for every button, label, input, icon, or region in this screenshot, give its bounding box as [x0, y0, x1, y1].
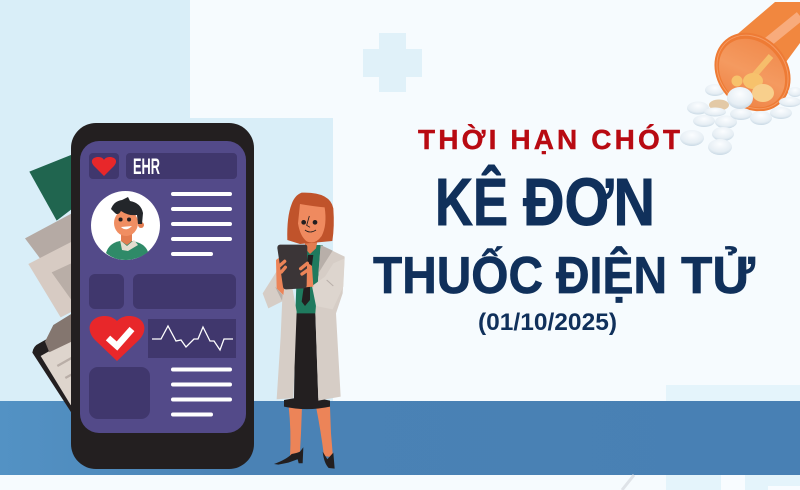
right sleeve [312, 258, 345, 309]
icon: small heart [92, 157, 116, 176]
spilled tablets [680, 87, 800, 155]
patient info lines [173, 194, 230, 254]
word: dien: ĐIỆN [556, 246, 667, 305]
clipboard clip [45, 312, 75, 352]
title: thuoc dien tu [373, 246, 756, 305]
left hand [276, 257, 286, 295]
check mark [108, 329, 132, 346]
pale diagonal stroke [622, 475, 634, 490]
blue floor band [0, 401, 800, 475]
right sleeve crease [327, 280, 333, 286]
face [298, 204, 326, 243]
bottom right decorative marks [721, 475, 800, 490]
tablet [779, 97, 800, 107]
pill bottle with spilled tablets [680, 2, 800, 155]
heart rate panel [148, 319, 236, 358]
tablet [712, 127, 734, 141]
tablet [750, 111, 772, 125]
lower square panel [89, 367, 150, 419]
nose and smile [305, 216, 316, 232]
fingers [279, 261, 309, 274]
eyes [304, 215, 315, 229]
tablet [715, 116, 737, 128]
light blue background panels [0, 0, 333, 402]
right shoe [323, 452, 335, 469]
tie [302, 255, 313, 306]
skirt [284, 312, 330, 409]
avatar face [114, 210, 138, 236]
neck [305, 237, 318, 254]
tablet [730, 108, 752, 120]
tablet [709, 100, 729, 110]
word: tu: TỬ [681, 246, 756, 305]
beige sheet [28, 240, 75, 317]
avatar smile [121, 226, 132, 229]
heart button [89, 153, 119, 179]
tablet [687, 102, 709, 114]
patient avatar [91, 191, 160, 260]
legs [289, 407, 333, 457]
bottle rim rib [702, 21, 800, 123]
title: ke don [435, 165, 655, 240]
clipboard board [32, 323, 75, 418]
avatar sweater [106, 241, 148, 260]
tablet [704, 108, 726, 116]
clipboard lines [57, 356, 75, 378]
wide panel [133, 274, 236, 309]
tablet [693, 115, 715, 127]
inner sheet [52, 262, 75, 305]
large front tablet [727, 87, 753, 109]
tablets behind bottle [705, 84, 725, 96]
bottle mouth rim [699, 17, 800, 127]
phone body [71, 123, 254, 469]
tablet [277, 245, 307, 289]
coat lapel shade [318, 245, 333, 273]
phone screen [80, 141, 246, 433]
bottom right pale panel [666, 385, 800, 490]
right forearm and hand [300, 263, 313, 287]
right coat panel [315, 245, 345, 401]
yellow pill two [743, 73, 763, 89]
left sleeve [263, 263, 292, 308]
avatar neck [121, 232, 132, 245]
green folder [29, 153, 75, 221]
grey sheet [25, 212, 75, 258]
yellow pill one [732, 76, 742, 86]
yellow inner stripe [752, 56, 771, 78]
bottle mouth inside [705, 25, 799, 121]
stack of papers and clipboard [25, 153, 75, 418]
green shirt [295, 245, 323, 313]
bottle body highlight [768, 16, 800, 42]
EHR label: EHR [133, 154, 160, 179]
title: red deadline line: THỜI HẠN CHÓT [418, 124, 680, 155]
avatar circle [91, 191, 160, 260]
icon: medical cross [363, 33, 422, 92]
yellow pill three [752, 84, 774, 102]
heart rate line [152, 326, 233, 350]
avatar hair [111, 197, 143, 224]
tablet [788, 87, 800, 97]
word: don: ĐƠN [523, 165, 655, 240]
tablet [708, 139, 732, 155]
icon: heart with check [90, 316, 144, 361]
avatar eyes [120, 218, 129, 222]
word: thuoc: THUỐC [373, 246, 543, 305]
clipboard paper [41, 337, 75, 407]
large heart [90, 316, 144, 361]
tablet [770, 107, 792, 119]
tablet [680, 130, 704, 146]
left coat panel [277, 260, 297, 399]
small square panel [89, 274, 124, 309]
lower info lines [173, 370, 230, 414]
bottle body [727, 2, 800, 100]
date: (01/10/2025) [478, 309, 617, 336]
avatar ear [138, 222, 144, 228]
EHR header bar [126, 153, 237, 179]
yellow pills inside bottle [732, 73, 774, 102]
phone [71, 123, 254, 469]
left shoe [274, 447, 303, 465]
word: ke: KÊ [435, 165, 508, 240]
doctor figure [263, 193, 345, 469]
hair [287, 193, 334, 244]
avatar collar [120, 240, 138, 251]
left sleeve shade [275, 287, 283, 301]
